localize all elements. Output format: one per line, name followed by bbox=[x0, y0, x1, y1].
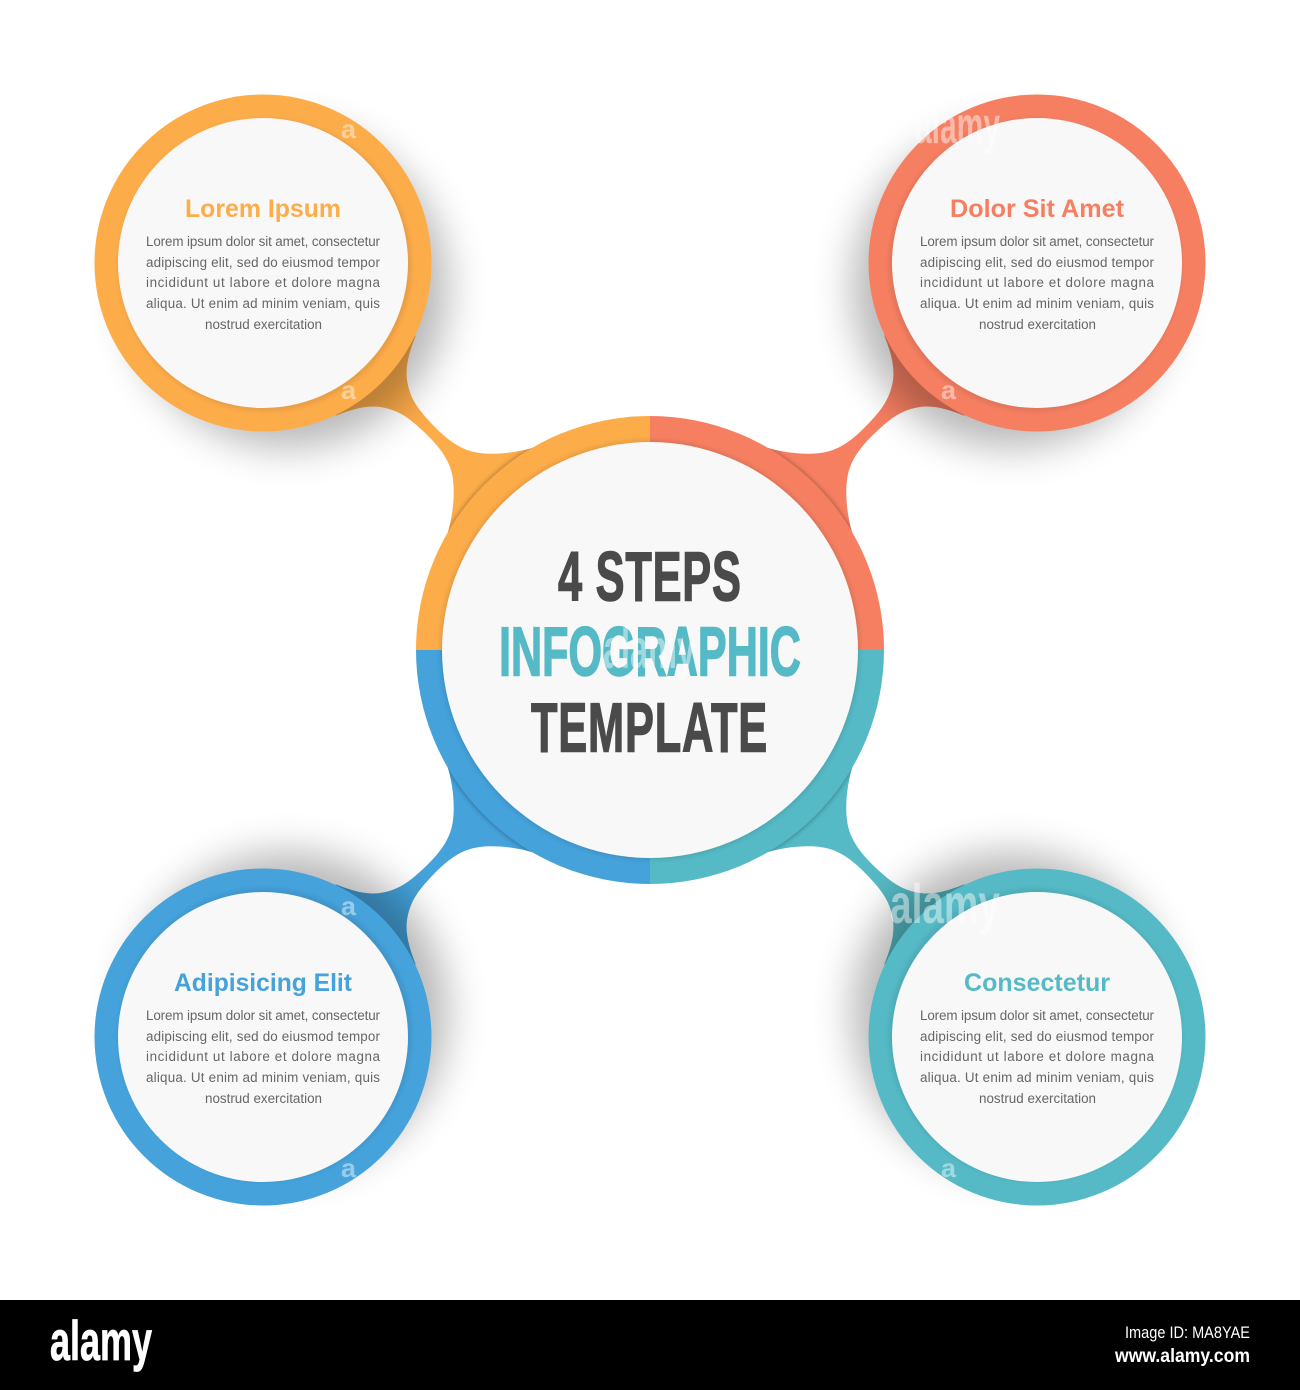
hub ring: four colored quadrants bbox=[416, 416, 884, 884]
body text bbox=[920, 1008, 1155, 1106]
body text bbox=[146, 234, 381, 332]
panel: step 2 Dolor Sit Amet bbox=[767, 94, 1206, 533]
heading: Consectetur bbox=[964, 969, 1110, 997]
connector: blue bbox=[117, 767, 533, 1183]
watermarks: a bbox=[341, 891, 357, 921]
body text: nostrud exercitation bbox=[979, 1091, 1096, 1106]
watermarks: a bbox=[341, 1153, 357, 1183]
body text: aliqua. Ut enim ad minim veniam, quis bbox=[146, 1070, 380, 1085]
body text: aliqua. Ut enim ad minim veniam, quis bbox=[920, 1070, 1154, 1085]
body text: nostrud exercitation bbox=[205, 317, 322, 332]
body text: Lorem ipsum dolor sit amet, consectetur bbox=[920, 234, 1155, 249]
watermarks: a bbox=[941, 375, 957, 405]
title bbox=[499, 538, 801, 767]
ring: blue bbox=[94, 868, 432, 1206]
watermarks: alamy bbox=[603, 617, 695, 680]
watermarks: alamy bbox=[890, 872, 1000, 935]
connector: teal bbox=[768, 767, 1183, 1183]
body text: incididunt ut labore et dolore magna bbox=[146, 275, 381, 290]
inner disc bbox=[892, 118, 1182, 408]
connector: coral bbox=[767, 121, 1183, 533]
body text: Lorem ipsum dolor sit amet, consectetur bbox=[146, 234, 381, 249]
title: 4 STEPS bbox=[558, 538, 741, 616]
website: www.alamy.com bbox=[1114, 1346, 1250, 1367]
body text: incididunt ut labore et dolore magna bbox=[920, 275, 1155, 290]
body text: nostrud exercitation bbox=[205, 1091, 322, 1106]
footer band bbox=[0, 1300, 1300, 1390]
heading: Lorem Ipsum bbox=[185, 195, 341, 223]
image id: Image ID: MA8YAE bbox=[1125, 1323, 1250, 1342]
heading: Dolor Sit Amet bbox=[950, 195, 1125, 223]
watermarks: a bbox=[341, 375, 357, 405]
watermarks: a bbox=[341, 114, 357, 144]
watermarks: a bbox=[941, 1153, 957, 1183]
body text: Lorem ipsum dolor sit amet, consectetur bbox=[920, 1008, 1155, 1023]
body text: adipiscing elit, sed do eiusmod tempor bbox=[920, 1029, 1155, 1044]
panel: step 4 Consectetur bbox=[768, 767, 1206, 1206]
inner disc bbox=[892, 892, 1182, 1182]
central hub bbox=[416, 416, 884, 884]
body text: adipiscing elit, sed do eiusmod tempor bbox=[920, 255, 1155, 270]
inner disc bbox=[118, 892, 408, 1182]
watermarks bbox=[341, 97, 1000, 1183]
ring: teal bbox=[868, 868, 1206, 1206]
panel: step 3 Adipisicing Elit bbox=[94, 767, 533, 1206]
body text: aliqua. Ut enim ad minim veniam, quis bbox=[146, 296, 380, 311]
body text bbox=[920, 234, 1155, 332]
watermarks: alamy bbox=[915, 97, 1000, 155]
body text: nostrud exercitation bbox=[979, 317, 1096, 332]
body text: incididunt ut labore et dolore magna bbox=[146, 1049, 381, 1064]
hub inner disc bbox=[442, 442, 858, 858]
title: TEMPLATE bbox=[531, 689, 767, 767]
ring: orange bbox=[94, 94, 432, 432]
ring: coral bbox=[868, 94, 1206, 432]
body text bbox=[146, 1008, 381, 1106]
footer logo: alamy bbox=[50, 1309, 152, 1372]
heading: Adipisicing Elit bbox=[174, 969, 353, 997]
body text: aliqua. Ut enim ad minim veniam, quis bbox=[920, 296, 1154, 311]
body text: incididunt ut labore et dolore magna bbox=[920, 1049, 1155, 1064]
body text: adipiscing elit, sed do eiusmod tempor bbox=[146, 255, 381, 270]
body text: adipiscing elit, sed do eiusmod tempor bbox=[146, 1029, 381, 1044]
inner disc bbox=[118, 118, 408, 408]
panel: step 1 Lorem Ipsum bbox=[94, 94, 533, 533]
connector: orange bbox=[117, 117, 533, 533]
body text: Lorem ipsum dolor sit amet, consectetur bbox=[146, 1008, 381, 1023]
title: INFOGRAPHIC bbox=[499, 613, 801, 691]
